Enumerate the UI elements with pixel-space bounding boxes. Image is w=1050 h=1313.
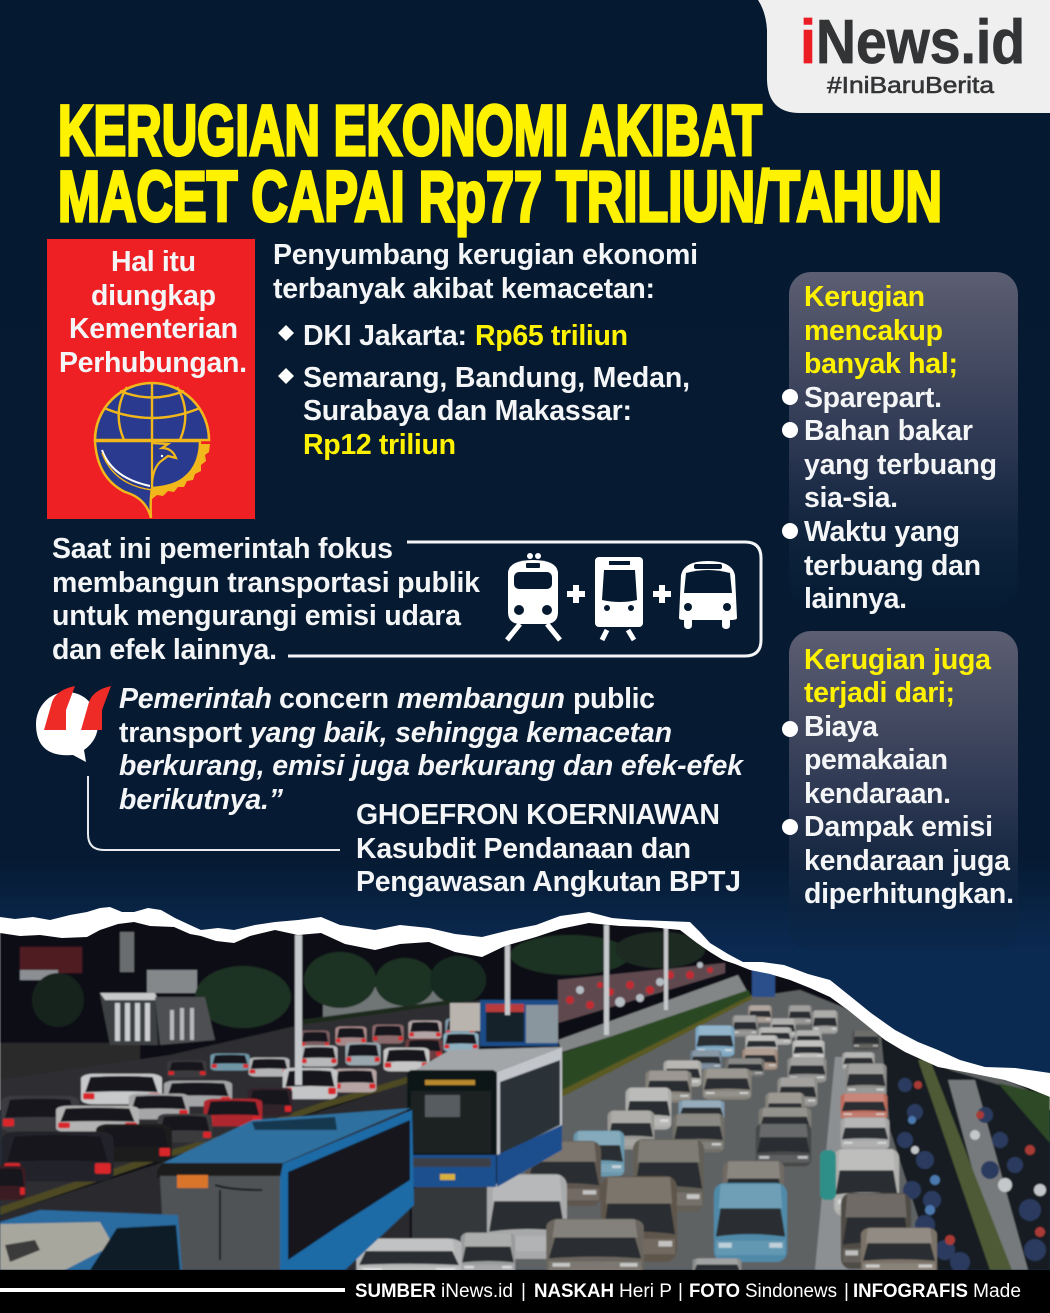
- right cars, far to near: [356, 1005, 937, 1278]
- text block: transportasi publik: untuk mengurangi emisi udara: [52, 600, 462, 632]
- quote text: transport: [119, 717, 242, 749]
- title: KERUGIAN EKONOMI AKIBAT: [58, 92, 762, 171]
- footer credits: Heri P: [619, 1281, 672, 1302]
- text block: penyumbang kerugian: Surabaya dan Makassar:: [303, 395, 632, 427]
- footer credits: SUMBER: [355, 1281, 436, 1302]
- panel: kerugian juga terjadi dari: Biaya: [804, 711, 879, 743]
- green median: [562, 990, 752, 1093]
- text block: penyumbang kerugian: [273, 239, 698, 461]
- quote text: Pemerintah: [119, 683, 272, 715]
- road: [412, 990, 1050, 1270]
- footer credits: |: [844, 1281, 849, 1302]
- logo: iNews.id: #IniBaruBerita: [827, 72, 994, 98]
- panel: kerugian juga terjadi dari: Kerugian juga: [804, 644, 992, 676]
- torn paper edge: [0, 907, 1050, 1110]
- lit lane between car columns: [815, 1057, 865, 1270]
- quote text: [119, 683, 745, 816]
- footer credits: |: [521, 1281, 526, 1302]
- logo: iNews.id: News.id: [816, 8, 1025, 77]
- panel: kerugian juga terjadi dari: kendaraan.: [804, 778, 951, 810]
- panel: kerugian mencakup: banyak hal;: [804, 348, 958, 380]
- pole lights: [295, 925, 668, 1085]
- panel: kerugian mencakup: yang terbuang: [804, 449, 997, 481]
- footer bar: [0, 1270, 1050, 1313]
- text block: penyumbang kerugian: Penyumbang kerugian ekonomi: [273, 239, 698, 271]
- logo: iNews.id: i: [800, 8, 816, 77]
- footer credits: |: [678, 1281, 683, 1302]
- panel: Kementerian Perhubungan: Kementerian: [69, 313, 238, 345]
- quote text: berkurang, emisi juga berkurang dan efek-efek: [119, 750, 745, 782]
- white truck: [450, 1003, 482, 1031]
- bus: middle: [407, 1047, 562, 1187]
- panel: kerugian juga terjadi dari: terjadi dari;: [804, 677, 955, 709]
- icon: tram: [595, 557, 643, 640]
- quote text: berikutnya.”: [119, 784, 284, 816]
- icon: plus: [567, 585, 585, 603]
- logo: iNews.id: [758, 0, 1050, 113]
- bus: far blue: [752, 968, 775, 997]
- panel: kerugian mencakup: Kerugian: [804, 281, 925, 313]
- quote attribution: Kasubdit Pendanaan dan: [356, 833, 691, 865]
- footer credits: NASKAH: [534, 1281, 614, 1302]
- footer credits: Sindonews: [745, 1281, 837, 1302]
- panel: kerugian juga terjadi dari: pemakaian: [804, 744, 948, 776]
- footer credits: iNews.id: [441, 1281, 513, 1302]
- icon: bus: [679, 561, 737, 629]
- title: [58, 92, 942, 237]
- panel: kerugian mencakup: Waktu yang: [804, 516, 960, 548]
- panel: kerugian mencakup: Sparepart.: [804, 382, 942, 414]
- moto lanes: [880, 1025, 1050, 1270]
- panel: kerugian mencakup: terbuang dan: [804, 550, 981, 582]
- footer credits: [355, 1281, 1021, 1302]
- text block: penyumbang kerugian: Semarang, Bandung, Medan,: [303, 362, 690, 394]
- panel: kerugian mencakup: sia-sia.: [804, 482, 898, 514]
- text block: transportasi publik: dan efek lainnya.: [52, 634, 277, 666]
- text block: transportasi publik: [52, 533, 480, 666]
- text block: penyumbang kerugian: Rp65 triliun: [475, 320, 628, 352]
- left cars: [300, 1030, 330, 1050]
- panel: kerugian mencakup: [782, 272, 1018, 615]
- panel: kerugian juga terjadi dari: kendaraan juga: [804, 845, 1011, 877]
- panel: Kementerian Perhubungan: Hal itu: [111, 246, 196, 278]
- motorbike rider: [820, 1150, 836, 1200]
- frame: transport icons: [288, 542, 761, 656]
- panel: Kementerian Perhubungan: [47, 239, 255, 519]
- text block: transportasi publik: Saat ini pemerintah fokus: [52, 533, 393, 565]
- bus: behind: [480, 1000, 558, 1046]
- text block: penyumbang kerugian: terbanyak akibat kemacetan:: [273, 273, 655, 305]
- quote attribution: [356, 799, 741, 898]
- icon: plus: [653, 585, 671, 603]
- footer rule: [0, 1288, 345, 1292]
- quote text: concern: [279, 683, 389, 715]
- quote attribution: Pengawasan Angkutan BPTJ: [356, 866, 741, 898]
- left traffic base: [0, 1000, 480, 1207]
- footer credits: Made: [973, 1281, 1021, 1302]
- quote text: membangun: [397, 683, 565, 715]
- footer credits: FOTO: [689, 1281, 740, 1302]
- panel: kerugian mencakup: lainnya.: [804, 583, 907, 615]
- panel: kerugian juga terjadi dari: [782, 631, 1018, 951]
- icon: train: [507, 553, 560, 640]
- text block: transportasi publik: membangun transportasi publik: [52, 567, 480, 599]
- bus: foreground: [157, 1108, 414, 1270]
- panel: kerugian juga terjadi dari: Dampak emisi: [804, 811, 993, 843]
- panel: Kementerian Perhubungan: Perhubungan.: [59, 347, 247, 379]
- quote text: yang baik, sehingga kemacetan: [248, 717, 672, 749]
- panel: Kementerian Perhubungan: diungkap: [91, 280, 216, 312]
- panel: kerugian mencakup: mencakup: [804, 315, 943, 347]
- far traffic: [558, 963, 725, 1023]
- icon: Kemenhub emblem: [95, 382, 210, 518]
- buildings and trees: [0, 932, 705, 1093]
- photo: traffic jam: [0, 900, 1050, 1278]
- quote connector line: [88, 776, 340, 850]
- panel: kerugian mencakup: Bahan bakar: [804, 415, 973, 447]
- text block: penyumbang kerugian: DKI Jakarta:: [303, 320, 467, 352]
- icon: quote bubble: [36, 686, 111, 762]
- text block: penyumbang kerugian: Rp12 triliun: [303, 429, 456, 461]
- footer credits: INFOGRAFIS: [853, 1281, 968, 1302]
- bus: bottom left: [0, 1210, 182, 1270]
- quote text: public: [573, 683, 655, 715]
- quote attribution: GHOEFRON KOERNIAWAN: [356, 799, 720, 831]
- panel: kerugian juga terjadi dari: diperhitungkan.: [804, 878, 1014, 910]
